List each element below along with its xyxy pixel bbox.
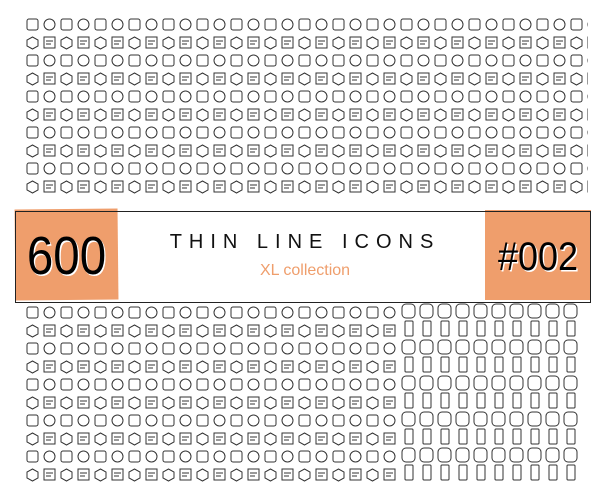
number 600: 600 (27, 226, 106, 286)
orange box left (15, 208, 118, 301)
banner (14, 208, 591, 303)
icon grid: top (22, 16, 588, 196)
frame (15, 211, 591, 303)
subtitle: XL collection (260, 262, 350, 279)
orange box right (485, 210, 591, 300)
icon grid: bottom left (22, 302, 398, 482)
title: THIN LINE ICONS (170, 231, 440, 253)
number #002: #002 (498, 235, 578, 279)
icon grid: bottom right (letters, dominoes) (400, 302, 580, 482)
